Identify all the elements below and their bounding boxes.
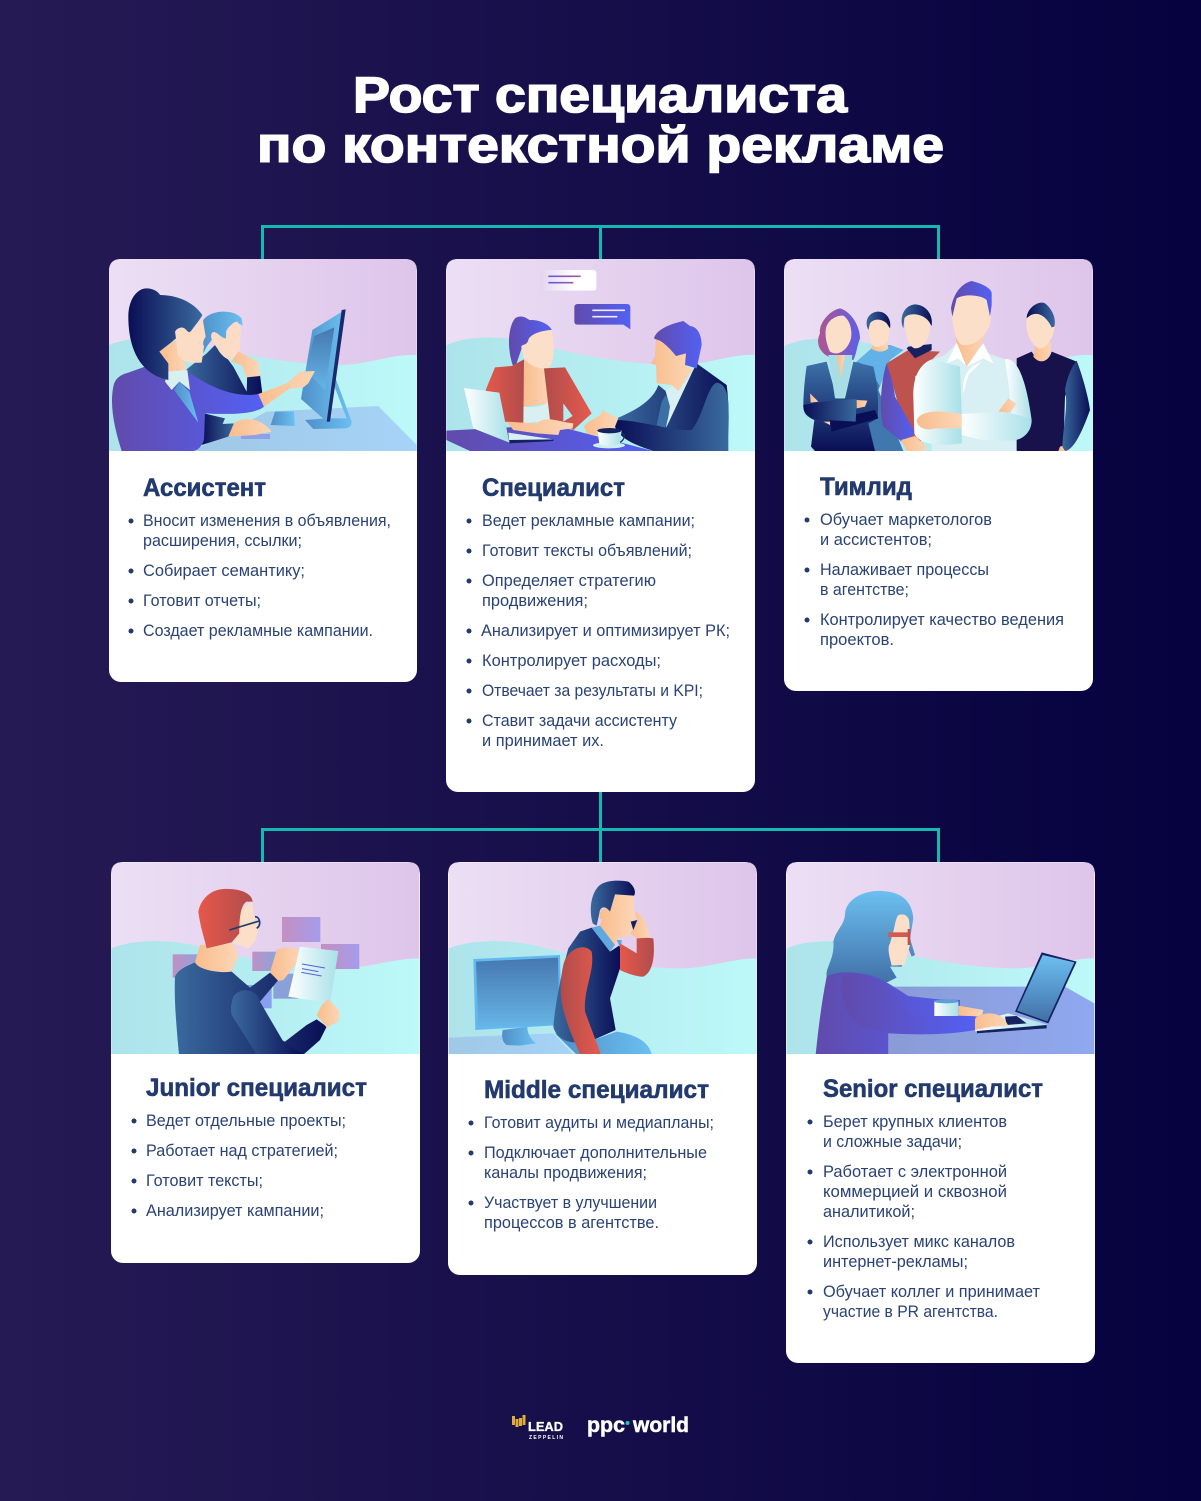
heading: Ассистент [143,474,266,502]
heading: Junior специалист [146,1074,367,1102]
panel: Middle специалист [448,862,757,1275]
duties list [468,1114,714,1232]
duties list: Готовит аудиты и медиапланы; [484,1114,714,1132]
logo: ppc world [587,1414,689,1437]
duties list: Работает над стратегией; [146,1142,338,1160]
duties list: Обучает коллег и принимает [823,1283,1040,1301]
duties list: и ассистентов; [820,531,932,549]
duties list: продвижения; [482,592,588,610]
illustration: woman working on laptop [787,862,1094,1055]
duties list: Использует микс каналов [823,1233,1015,1251]
duties list: и сложные задачи; [823,1133,962,1151]
duties list: расширения, ссылки; [143,532,302,550]
illustration: team of five [784,259,1093,451]
duties list: аналитикой; [823,1203,915,1221]
duties list: Отвечает за результаты и KPI; [482,682,703,700]
duties list: Готовит тексты объявлений; [482,542,692,560]
duties list: Берет крупных клиентов [823,1113,1007,1131]
logo: Lead Zeppelin: ZEPPELIN [529,1435,563,1441]
duties list: проектов. [820,631,894,649]
duties list: Обучает маркетологов [820,511,992,529]
illustration: man reading a document [111,862,419,1055]
duties list: каналы продвижения; [484,1164,647,1182]
heading: Тимлид [820,473,912,501]
top connector lines [262,226,938,261]
duties list: Налаживает процессы [820,561,989,579]
panel: Junior специалист [111,862,420,1263]
duties list: Вносит изменения в объявления, [143,512,391,530]
duties list: и принимает их. [482,732,604,750]
duties list [808,1113,1040,1321]
duties list: Работает с электронной [823,1163,1007,1181]
duties list: Контролирует расходы; [482,652,661,670]
duties list: Ведет отдельные проекты; [146,1112,346,1130]
logo: ppc world: ppc [587,1414,625,1437]
duties list [132,1112,346,1220]
duties list: коммерцией и сквозной [823,1183,1007,1201]
heading: Middle специалист [484,1076,709,1104]
duties list: Создает рекламные кампании. [143,622,373,640]
logo: Lead Zeppelin: LEAD [528,1419,563,1434]
duties list: Участвует в улучшении [484,1194,657,1212]
illustration: meeting at a table [446,259,755,451]
duties list: Контролирует качество ведения [820,611,1064,629]
duties list: Определяет стратегию [482,572,656,590]
panel: Ассистент [109,259,417,682]
heading: Senior специалист [823,1075,1043,1103]
heading: Специалист [482,474,625,502]
duties list: участие в PR агентства. [823,1303,998,1321]
duties list: процессов в агентстве. [484,1214,659,1232]
duties list: Анализирует кампании; [146,1202,324,1220]
duties list: Подключает дополнительные [484,1144,707,1162]
panel: Специалист [446,259,755,792]
duties list: Ведет рекламные кампании; [482,512,695,530]
duties list: Готовит отчеты; [143,592,261,610]
duties list: Анализирует и оптимизирует РК; [481,622,730,640]
duties list: Ставит задачи ассистенту [482,712,678,730]
duties list [466,512,730,750]
duties list: Готовит тексты; [146,1172,263,1190]
title: по контекстной рекламе [257,117,944,173]
panel: Senior специалист [786,862,1095,1363]
bottom connector lines [262,791,938,864]
illustration: woman and man at monitor [109,259,417,451]
duties list: интернет-рекламы; [823,1253,968,1271]
illustration: man on the phone [449,862,757,1055]
logo: ppc world: world [632,1414,689,1437]
duties list: в агентстве; [820,581,909,599]
logo: Lead Zeppelin [512,1415,563,1441]
panel: Тимлид [784,259,1093,691]
duties list: Собирает семантику; [143,562,305,580]
duties list [804,511,1064,649]
title: Рост специалиста [353,67,848,123]
title [257,67,944,173]
duties list [128,512,391,640]
